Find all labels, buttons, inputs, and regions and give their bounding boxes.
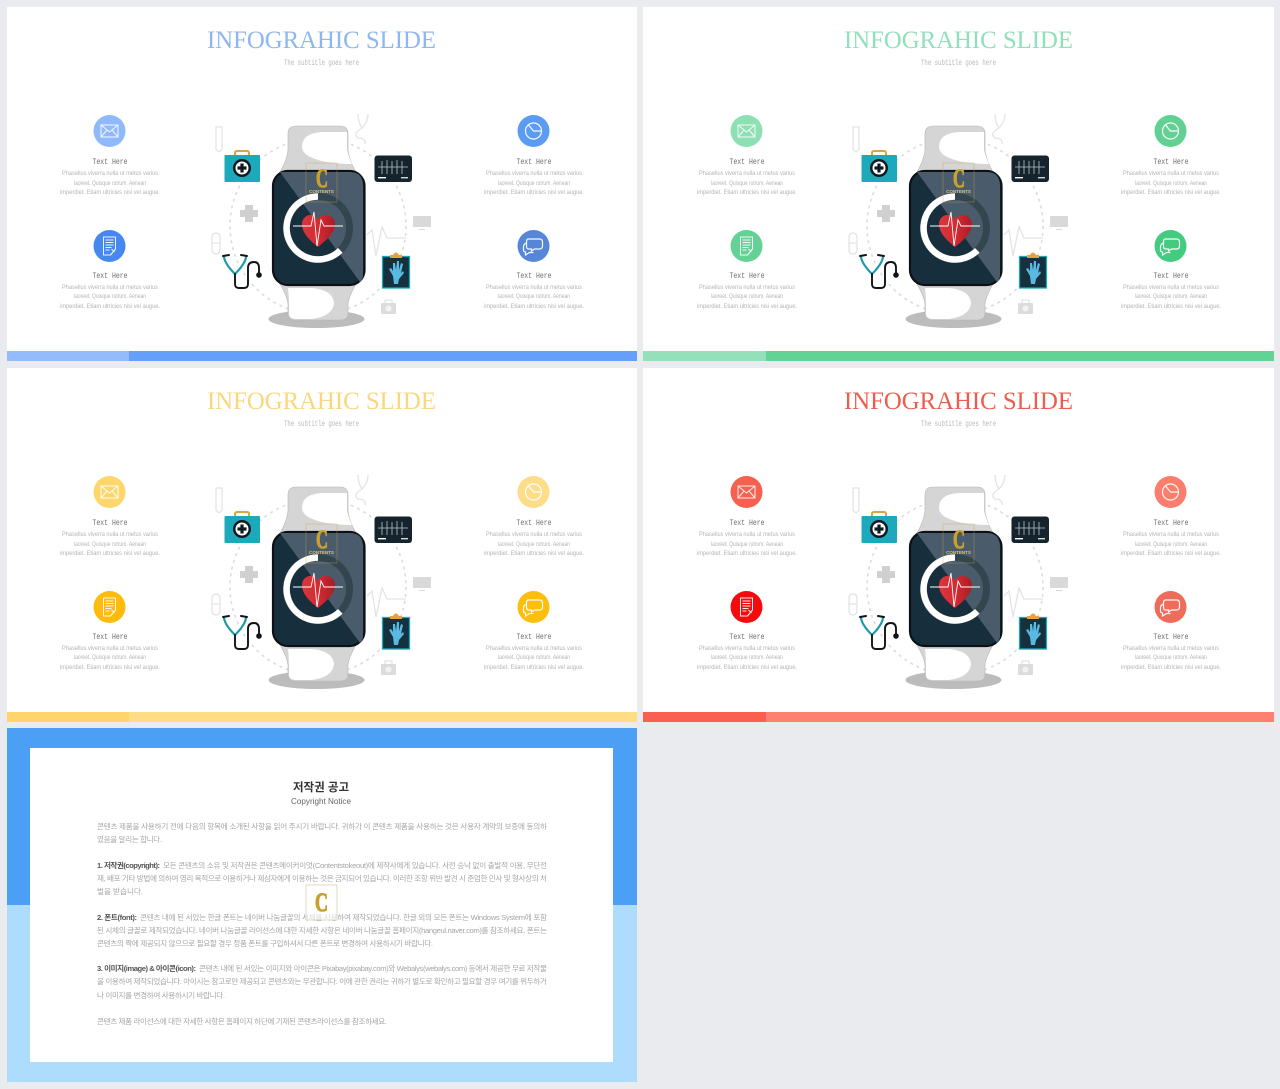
subtitle: The subtitle goes here xyxy=(284,59,359,68)
item: document xyxy=(697,230,797,310)
section 2: font: 2. 폰트(font): xyxy=(97,913,137,922)
item: mail: imperdiet. Etiam ultricies nisi vel augue. xyxy=(60,190,160,196)
item: chat: Text Here xyxy=(1154,633,1189,642)
title: INFOGRAHIC SLIDE xyxy=(844,27,1073,54)
intro text xyxy=(97,821,547,844)
item: chart: Text Here xyxy=(1154,519,1189,528)
item: document xyxy=(60,230,160,310)
item: chart: Text Here xyxy=(1154,158,1189,167)
section 2: font: 콘텐츠 내에 된 서있는 한글 폰트는 네이버 나눔글꼴의 서체를 사용하여 제작되었습니다. 한글 외의 모든 폰트는 Windows System에 포함 xyxy=(140,912,547,922)
heading: 저작권 공고 xyxy=(293,780,349,794)
panel: copyright notice xyxy=(7,728,637,1082)
watermark xyxy=(943,163,974,202)
item: document: Text Here xyxy=(92,633,128,642)
item: chat: imperdiet. Etiam ultricies nisi vel augue. xyxy=(484,304,584,310)
item: mail: imperdiet. Etiam ultricies nisi vel augue. xyxy=(60,551,160,557)
item: chat: Text Here xyxy=(516,633,552,642)
subtitle: The subtitle goes here xyxy=(284,420,359,429)
item: chart: imperdiet. Etiam ultricies nisi vel augue. xyxy=(484,190,584,196)
item: chat xyxy=(484,591,584,671)
bottom bar xyxy=(7,712,637,722)
illustration: smartwatch with heart xyxy=(212,475,431,689)
illustration: smartwatch with heart xyxy=(849,114,1068,328)
panel: blue slide xyxy=(7,7,637,361)
item: chart: Text Here xyxy=(516,519,552,528)
item: chat: Text Here xyxy=(1154,272,1189,281)
item: document: Phasellus viverra nulla ut metus varius xyxy=(699,646,795,652)
item: chat: laoreet. Quisque rutrum. Aenean xyxy=(498,655,570,661)
item: document xyxy=(60,591,160,671)
item: document: imperdiet. Etiam ultricies nisi vel augue. xyxy=(60,665,160,671)
item: mail: laoreet. Quisque rutrum. Aenean xyxy=(74,181,146,187)
item: mail: laoreet. Quisque rutrum. Aenean xyxy=(711,181,783,187)
item: document: Text Here xyxy=(730,272,765,281)
item: chart: laoreet. Quisque rutrum. Aenean xyxy=(1135,181,1207,187)
watermark xyxy=(306,163,337,202)
item: document: Phasellus viverra nulla ut metus varius xyxy=(62,285,158,291)
watermark: CONTENTS xyxy=(309,189,334,194)
watermark xyxy=(306,885,337,920)
section 1: copyright: 벌을 받습니다. xyxy=(97,886,143,896)
title: INFOGRAHIC SLIDE xyxy=(207,388,436,415)
item: chart: imperdiet. Etiam ultricies nisi vel augue. xyxy=(1121,190,1221,196)
panel: yellow slide xyxy=(7,368,637,722)
item: mail: Text Here xyxy=(92,158,128,167)
section 3: image and icon: 콘텐츠 내에 된 서있는 이미지와 아이콘은 Pixabay(pixabay.com)와 Webalys(webalys.com) 등에서 제공한 무료 저작물 xyxy=(199,963,547,973)
watermark: CONTENTS xyxy=(309,550,334,555)
item: mail: imperdiet. Etiam ultricies nisi vel augue. xyxy=(697,190,797,196)
watermark xyxy=(306,524,337,563)
item: chart xyxy=(484,476,584,557)
item: mail: Phasellus viverra nulla ut metus varius xyxy=(62,171,158,177)
illustration: smartwatch with heart xyxy=(212,114,431,328)
item: document: laoreet. Quisque rutrum. Aenean xyxy=(711,294,783,300)
item: chat: Phasellus viverra nulla ut metus varius xyxy=(486,646,582,652)
section 2: font: 콘텐츠의 짝에 제공되지 않으므로 필요할 경우 정품 폰트를 구입하셔서 다른 폰트로 변경하여 사용하시기 바랍니다. xyxy=(97,938,433,948)
item: chat: laoreet. Quisque rutrum. Aenean xyxy=(498,294,570,300)
section 2: font xyxy=(97,912,547,948)
section 3: image and icon: 3. 이미지(image) & 아이콘(icon): xyxy=(97,963,196,973)
item: chart: Phasellus viverra nulla ut metus varius xyxy=(486,171,582,177)
bottom bar xyxy=(643,712,1274,722)
section 3: image and icon xyxy=(97,963,547,1000)
item: mail: Phasellus viverra nulla ut metus varius xyxy=(699,532,795,538)
watermark: C xyxy=(316,525,328,554)
item: document: Phasellus viverra nulla ut metus varius xyxy=(62,646,158,652)
watermark xyxy=(943,524,974,563)
item: chat: laoreet. Quisque rutrum. Aenean xyxy=(1135,294,1207,300)
watermark: CONTENTS xyxy=(946,189,971,194)
item: chat xyxy=(1121,591,1221,671)
item: document: imperdiet. Etiam ultricies nisi vel augue. xyxy=(60,304,160,310)
item: mail: imperdiet. Etiam ultricies nisi vel augue. xyxy=(697,551,797,557)
section 1: copyright: 모든 콘텐츠의 소유 및 저작권은 콘텐츠메이커이엇(Contentstokeout)에 제작사에게 있습니다. 사전 승낙 없이 출발적 이용, 무단전 xyxy=(163,860,547,870)
item: mail: Phasellus viverra nulla ut metus varius xyxy=(62,532,158,538)
intro text: 콘텐츠 제품을 사용하기 전에 다음의 항목에 소개된 사항을 읽어 주시기 바랍니다. 귀하가 이 콘텐츠 제품을 사용하는 것은 사용자 계약의 보증에 동의하 xyxy=(97,821,547,831)
item: chart: Phasellus viverra nulla ut metus varius xyxy=(486,532,582,538)
item: chart: Phasellus viverra nulla ut metus varius xyxy=(1123,171,1219,177)
watermark: C xyxy=(953,525,965,554)
item: document: imperdiet. Etiam ultricies nisi vel augue. xyxy=(697,304,797,310)
item: chat: Text Here xyxy=(516,272,552,281)
item: chart: laoreet. Quisque rutrum. Aenean xyxy=(498,542,570,548)
watermark: C xyxy=(316,164,328,193)
item: mail: laoreet. Quisque rutrum. Aenean xyxy=(711,542,783,548)
item: chat: imperdiet. Etiam ultricies nisi vel augue. xyxy=(1121,665,1221,671)
item: mail: Text Here xyxy=(92,519,128,528)
section 1: copyright xyxy=(97,860,547,896)
item: chart: imperdiet. Etiam ultricies nisi vel augue. xyxy=(484,551,584,557)
item: mail: laoreet. Quisque rutrum. Aenean xyxy=(74,542,146,548)
item: chat xyxy=(1121,230,1221,310)
illustration: smartwatch with heart xyxy=(849,475,1068,689)
bottom bar xyxy=(7,351,637,361)
intro text: 였음을 알리는 합니다. xyxy=(97,834,162,844)
item: chart xyxy=(1121,476,1221,557)
item: chart: laoreet. Quisque rutrum. Aenean xyxy=(1135,542,1207,548)
item: document: Text Here xyxy=(730,633,765,642)
bottom bar xyxy=(643,351,1274,361)
item: document xyxy=(697,591,797,671)
section 1: copyright: 1. 저작권(copyright): xyxy=(97,860,160,870)
panel: green slide xyxy=(643,7,1274,361)
item: document: Phasellus viverra nulla ut metus varius xyxy=(699,285,795,291)
panel: red slide xyxy=(643,368,1274,722)
item: mail: Text Here xyxy=(730,158,765,167)
watermark: C xyxy=(315,888,328,917)
title: INFOGRAHIC SLIDE xyxy=(844,388,1073,415)
item: mail xyxy=(60,476,160,557)
subtitle: The subtitle goes here xyxy=(921,59,996,68)
section 3: image and icon: 을 이용하여 제작되었습니다. 아이시는 참고로만 제공되고 콘텐츠와는 무관합니다. 이에 관한 권리는 귀하가 별도로 확인하고 필요할 경우 여기를 위두하거 xyxy=(97,976,547,986)
item: chart: laoreet. Quisque rutrum. Aenean xyxy=(498,181,570,187)
item: mail: Text Here xyxy=(730,519,765,528)
item: document: laoreet. Quisque rutrum. Aenean xyxy=(74,294,146,300)
item: mail xyxy=(60,115,160,196)
title: INFOGRAHIC SLIDE xyxy=(207,27,436,54)
item: chat xyxy=(484,230,584,310)
item: chat: laoreet. Quisque rutrum. Aenean xyxy=(1135,655,1207,661)
watermark: CONTENTS xyxy=(946,550,971,555)
subtitle: The subtitle goes here xyxy=(921,420,996,429)
item: chart xyxy=(1121,115,1221,196)
license note: 콘텐츠 제품 라이선스에 대한 자세한 사항은 홈페이지 하단에 기재된 콘텐츠라이선스를 참조하세요. xyxy=(97,1016,387,1026)
item: chat: Phasellus viverra nulla ut metus varius xyxy=(1123,285,1219,291)
item: mail: Phasellus viverra nulla ut metus varius xyxy=(699,171,795,177)
watermark: C xyxy=(953,164,965,193)
item: chat: imperdiet. Etiam ultricies nisi vel augue. xyxy=(484,665,584,671)
item: mail xyxy=(697,476,797,557)
item: chart: Text Here xyxy=(516,158,552,167)
item: chat: Phasellus viverra nulla ut metus varius xyxy=(486,285,582,291)
item: chart: imperdiet. Etiam ultricies nisi vel augue. xyxy=(1121,551,1221,557)
item: chart: Phasellus viverra nulla ut metus varius xyxy=(1123,532,1219,538)
item: document: Text Here xyxy=(92,272,128,281)
item: document: laoreet. Quisque rutrum. Aenean xyxy=(711,655,783,661)
item: chat: Phasellus viverra nulla ut metus varius xyxy=(1123,646,1219,652)
item: chat: imperdiet. Etiam ultricies nisi vel augue. xyxy=(1121,304,1221,310)
item: document: laoreet. Quisque rutrum. Aenean xyxy=(74,655,146,661)
item: document: imperdiet. Etiam ultricies nisi vel augue. xyxy=(697,665,797,671)
section 1: copyright: 재, 배포 기타 방법에 의하여 영리 목적으로 이용하거나 제삼자에게 이용하는 것은 금지되어 있습니다. 이러한 조항 위반 발견 시 준엄한 민사 및 형사상의 처 xyxy=(97,873,547,883)
subheading: Copyright Notice xyxy=(291,796,351,806)
section 3: image and icon: 나 이미지를 변경하여 사용하시기 바랍니다. xyxy=(97,990,225,1000)
item: mail xyxy=(697,115,797,196)
item: chart xyxy=(484,115,584,196)
section 2: font: 된 시체의 글꼴로 제작되었습니다. 네이버 나눔글꼴 라이선스에 대한 자세한 사항은 네이버 나눔글꼴 홈페이지(hangeul.naver.com)를 참조하세요. 폰트는 xyxy=(97,925,547,935)
